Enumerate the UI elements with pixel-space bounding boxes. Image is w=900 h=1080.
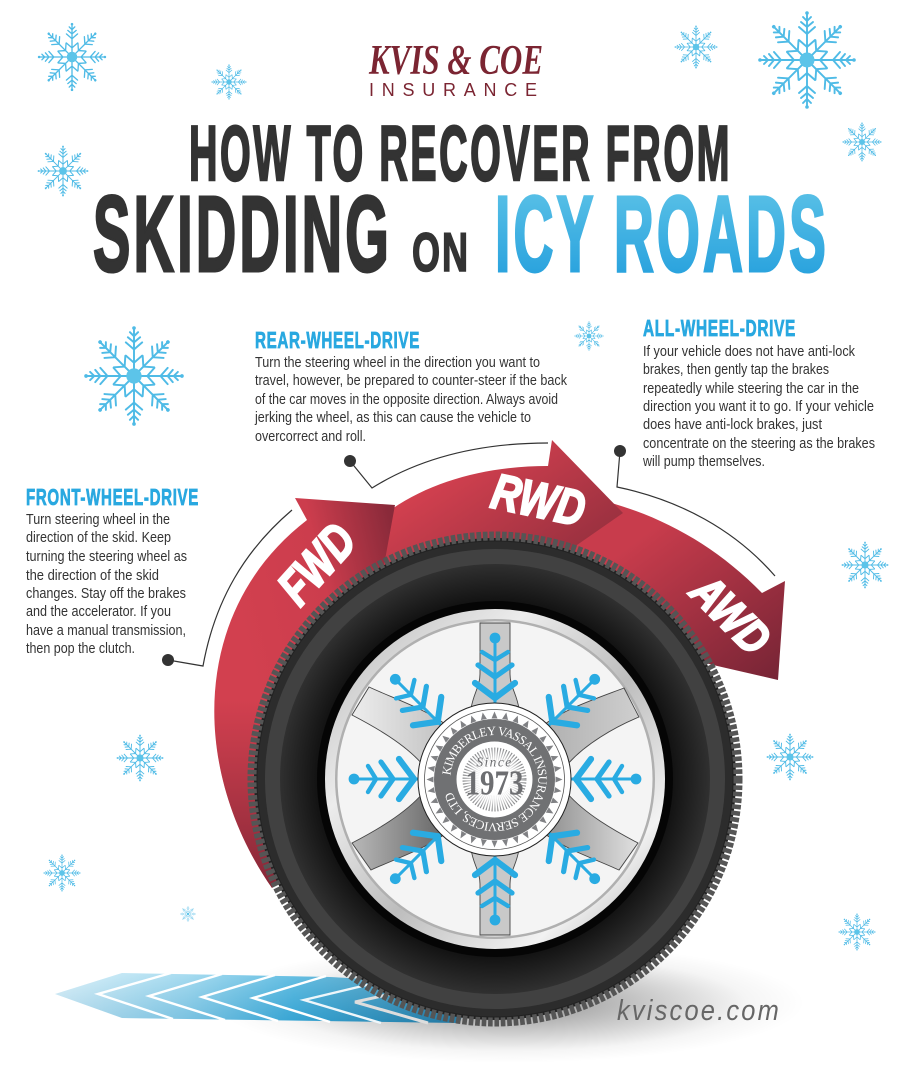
label: FWD: FWD bbox=[267, 512, 367, 615]
text block: all-wheel-drive: ALL-WHEEL-DRIVE bbox=[643, 315, 796, 341]
text block: rear-wheel-drive: travel, however, be prepared to counter-steer if the back bbox=[255, 373, 568, 389]
snowflake arms on rim bbox=[349, 633, 641, 925]
spoke: upper right bbox=[545, 688, 639, 765]
since 1973: 1973 bbox=[466, 764, 524, 802]
text block: rear-wheel-drive bbox=[254, 327, 568, 445]
spoke: upper left bbox=[352, 687, 445, 765]
text block: all-wheel-drive: If your vehicle does not have anti-lock bbox=[643, 344, 856, 360]
spoke: lower left bbox=[352, 793, 445, 870]
text block: front-wheel-drive: FRONT-WHEEL-DRIVE bbox=[26, 484, 199, 510]
text block: front-wheel-drive: the direction of the skid bbox=[26, 568, 159, 584]
snowflake: above front-wheel-drive bbox=[84, 326, 184, 426]
title bbox=[93, 109, 829, 294]
logo: INSURANCE bbox=[369, 80, 537, 100]
text block: all-wheel-drive: repeatedly while steering the car in the bbox=[643, 381, 859, 397]
text block: all-wheel-drive: direction you want it to go. If your vehicle bbox=[643, 399, 874, 415]
spoke: lower right bbox=[545, 793, 638, 870]
text block: rear-wheel-drive: Turn the steering wheel in the direction you want to bbox=[255, 355, 540, 371]
spoke: bottom bbox=[471, 849, 519, 935]
text block: front-wheel-drive: and the accelerator. If you bbox=[26, 604, 171, 620]
snowflake: tiny lower left bbox=[180, 906, 196, 922]
text block: front-wheel-drive: changes. Stay off the brakes bbox=[26, 586, 186, 602]
text block: all-wheel-drive: will pump themselves. bbox=[642, 454, 765, 470]
logo: KVIS & COE bbox=[368, 38, 543, 84]
logo bbox=[368, 38, 543, 100]
text block: rear-wheel-drive: overcorrect and roll. bbox=[255, 429, 366, 445]
arrow: RWD bbox=[380, 440, 623, 600]
text block: rear-wheel-drive: of the car moves in the opposite direction. Always avoid bbox=[255, 392, 558, 408]
snowflake: near logo right bbox=[675, 26, 717, 68]
snowflake: left of tire bbox=[117, 735, 163, 781]
title: SKIDDING bbox=[93, 173, 392, 294]
text block: front-wheel-drive: turning the steering wheel as bbox=[26, 549, 187, 565]
tire bbox=[252, 536, 738, 1022]
snowflake: lower right bbox=[838, 913, 876, 951]
snowflake: near logo left bbox=[211, 64, 247, 100]
snowflake: right of title bbox=[842, 122, 882, 162]
text block: rear-wheel-drive: REAR-WHEEL-DRIVE bbox=[255, 327, 420, 353]
ground shadow bbox=[215, 943, 805, 1063]
text block: front-wheel-drive: Turn steering wheel in the bbox=[26, 512, 170, 528]
text block: front-wheel-drive: then pop the clutch. bbox=[26, 641, 135, 657]
arrow: FWD bbox=[214, 498, 395, 888]
connector: front-wheel-drive bbox=[162, 510, 292, 666]
hub seal: KIMBERLEY VASSAL INSURANCE SERVICES, LTD. bbox=[442, 726, 547, 832]
connector: all-wheel-drive bbox=[614, 445, 775, 576]
snowflake: left of title bbox=[38, 146, 88, 196]
label: AWD: AWD bbox=[680, 564, 781, 665]
snowflake: lower left bbox=[43, 854, 81, 892]
text block: front-wheel-drive bbox=[26, 484, 199, 657]
since 1973: Since bbox=[476, 754, 513, 770]
wheel rim bbox=[325, 609, 665, 949]
text block: front-wheel-drive: have a manual transmission, bbox=[26, 623, 186, 639]
label: RWD: RWD bbox=[487, 463, 590, 537]
text block: all-wheel-drive: brakes, then gently tap the brakes bbox=[643, 362, 829, 378]
title: ON bbox=[412, 221, 470, 283]
snowflake: right middle bbox=[842, 542, 888, 588]
text block: front-wheel-drive: direction of the skid. Keep bbox=[26, 530, 171, 546]
hub seal bbox=[418, 702, 572, 856]
text block: rear-wheel-drive: jerking the wheel, as this can cause the vehicle to bbox=[254, 410, 531, 426]
snowflake: top left large bbox=[38, 23, 106, 91]
skid marks chevrons bbox=[55, 973, 470, 1023]
arrow: AWD bbox=[560, 500, 785, 680]
text block: all-wheel-drive bbox=[642, 315, 875, 470]
website: kviscoe.com bbox=[617, 995, 781, 1027]
text block: all-wheel-drive: does have anti-lock brakes, just bbox=[643, 417, 822, 433]
connector: rear-wheel-drive bbox=[344, 443, 548, 488]
snowflake: right of tire bbox=[767, 734, 813, 780]
since 1973 bbox=[466, 754, 524, 802]
snowflake: top right large bbox=[758, 11, 856, 109]
spoke: top bbox=[471, 623, 519, 709]
snowflake: between rear and all wheel text bbox=[574, 321, 604, 351]
